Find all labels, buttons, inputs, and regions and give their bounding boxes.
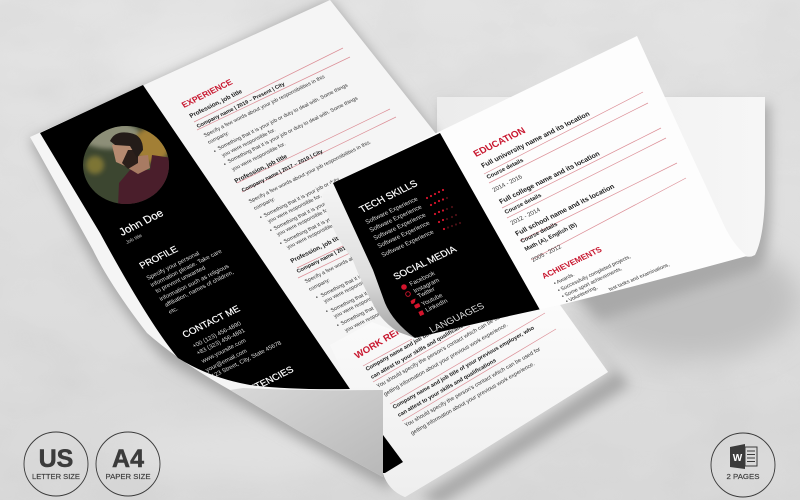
experience section: you were responsible for. — [267, 194, 323, 225]
page two sheet — [333, 36, 747, 338]
profile section: affiliation, names of children, — [164, 270, 236, 309]
achievements section: ACHIEVEMENTS — [540, 245, 604, 281]
work references section: getting information about your previous work experience. — [383, 322, 510, 398]
work references section: can attest to your skills and qualifications — [397, 358, 498, 419]
badge: A4 paper size: A4 — [112, 445, 144, 473]
contact section — [182, 305, 294, 386]
page one sheet — [30, 0, 608, 497]
work references section: Company name and job title of your previous employer, who — [365, 287, 509, 373]
contact section: your@email.com — [205, 349, 249, 374]
profile photo — [83, 126, 169, 204]
resume page two — [322, 36, 747, 340]
profile section: information such as religious — [159, 264, 230, 303]
social media section: Instagram — [412, 277, 441, 295]
experience section: Specify a few words about your job responsibilities in this. — [248, 140, 373, 205]
experience section: Company name | 2019 – Present | City — [196, 82, 286, 130]
education section: Full college name and its location — [498, 151, 601, 206]
contact section: CONTACT ME — [181, 304, 242, 340]
experience section: Profession, job title — [289, 233, 345, 265]
experience section: • — [213, 149, 218, 155]
tech skills section: Software Experience — [380, 229, 436, 259]
icon: Word document: W — [733, 453, 743, 464]
badge: US letter size — [24, 432, 88, 496]
experience section: Something that it is your job — [340, 293, 402, 327]
experience section: you were responsible for. — [333, 289, 389, 320]
name and job title: John Doe — [117, 208, 166, 238]
lower fold of the sheet — [349, 306, 632, 500]
badge: US letter size: US — [39, 445, 73, 473]
badge: A4 paper size — [96, 432, 160, 496]
profile section: PROFILE — [138, 244, 180, 271]
experience section: company: — [308, 277, 332, 293]
social media section: Youtube — [420, 292, 445, 308]
experience section: you were responsible for. — [286, 220, 342, 251]
social media section — [392, 244, 487, 335]
page two black sidebar — [333, 133, 540, 338]
experience section: • — [336, 323, 341, 329]
contact section: 123 Street, City, State 45678 — [211, 340, 284, 380]
resume page one — [26, 0, 440, 492]
experience section: you were responsible for. — [221, 128, 277, 159]
page one black sidebar — [40, 85, 350, 389]
experience section: Something that it is your job or duty to deal with. Some things — [217, 83, 350, 152]
social media section: SOCIAL MEDIA — [392, 244, 459, 282]
work references section: Company name and job title of your previous employer, who — [392, 325, 536, 411]
education section: Course details — [520, 222, 559, 245]
work references section: You should specify the person's contact which can be used for — [376, 308, 514, 390]
experience section: you were responsible for. — [323, 274, 379, 305]
experience section: you were responsible for. — [231, 142, 287, 173]
contact section: www.yoursite.com — [200, 338, 248, 365]
back sheet behind resume page two — [437, 97, 770, 320]
profile section: to prevent unwanted — [155, 266, 207, 295]
social media section: LinkedIn — [424, 298, 450, 314]
education section: 2012 - 2014 — [510, 207, 542, 227]
experience section: • — [223, 162, 228, 168]
black corner showing under lower sheet — [383, 435, 403, 473]
experience section: Specify a few words about your job — [304, 243, 381, 285]
sheet shadow on the ground — [420, 310, 630, 500]
experience section: • — [325, 309, 330, 315]
experience section: Specify a few words about your job responsibilities in this — [203, 74, 327, 139]
page one black corner under the fold — [383, 435, 403, 473]
social media section: LANGUAGES — [428, 301, 487, 335]
experience section: • — [269, 228, 274, 234]
experience section: you were responsible for. — [344, 303, 400, 334]
profile section: Specify your personal — [146, 251, 201, 282]
experience section: Something that it is your job or duty — [263, 177, 341, 219]
profile section: information please. Take care — [150, 249, 224, 289]
experience section: Something that it is your job — [320, 265, 382, 299]
badge: Word document, 2 pages — [711, 433, 775, 497]
experience section: Something that it is your job — [330, 280, 392, 314]
education section — [472, 92, 686, 264]
education section: Course details — [504, 193, 543, 216]
social media section: Twitter — [416, 286, 437, 300]
achievements section: • Successfully completed projects, — [557, 254, 632, 294]
tech skills section: Software Experience — [372, 212, 428, 242]
badge: US letter size: LETTER SIZE — [32, 472, 80, 481]
experience section: you were responsible for. — [276, 207, 332, 238]
education section: Math (A), English (B) — [524, 222, 578, 253]
badge: A4 paper size: PAPER SIZE — [106, 472, 151, 481]
experience section: • — [315, 295, 320, 301]
experience section: Profession, job title — [233, 153, 289, 185]
experience section — [180, 48, 402, 334]
experience section: • — [279, 241, 284, 247]
education section: 2005 - 2012 — [531, 244, 563, 264]
profile section — [138, 244, 236, 316]
profile section: etc. — [168, 306, 180, 316]
education section: Course details — [486, 158, 525, 181]
work references section: You should specify the person's contact which can be used for — [404, 347, 542, 429]
tech skills section: TECH SKILLS — [358, 178, 420, 215]
work references section: WORK REFERENCES — [353, 302, 444, 362]
page one folded corner flap — [230, 388, 383, 477]
contact section: +00 (123) 456-4890 — [192, 321, 243, 350]
social icons — [401, 284, 424, 316]
experience section: Something that it is your job or duty — [273, 190, 351, 232]
tech skills section: Software Experience — [364, 196, 420, 226]
experience section: EXPERIENCE — [180, 77, 235, 110]
tech skills section: Software Experience — [376, 220, 432, 250]
achievements section — [542, 247, 670, 302]
education section: Full university name and its location — [480, 111, 591, 170]
tech skills section: Software Experience — [368, 204, 424, 234]
achievements section: test tasks and examinations, — [608, 262, 671, 293]
page one sheet shadow — [30, 0, 437, 490]
name and job title: Job title — [125, 233, 144, 246]
experience section: Company name | 2015 – 2017 | City — [296, 230, 379, 275]
work references section — [354, 312, 556, 436]
experience section: • — [259, 215, 264, 221]
contact section: +83 (323) 456-4891 — [196, 328, 247, 357]
work references section: getting information about your previous work experience. — [410, 361, 537, 437]
experience section: Something that it is your job or duty to deal with. Some things — [227, 96, 360, 165]
experience section: Something that it is your job or duty — [283, 203, 361, 245]
experience section: Company name | 2017 – 2019 | City — [241, 149, 324, 194]
tech skills section — [358, 178, 461, 259]
experience section: company: — [253, 196, 277, 212]
social media section: Facebook — [408, 270, 437, 288]
lower sheet — [330, 305, 608, 497]
achievements section: • Some sport achievements, — [561, 266, 623, 300]
education section: Full school name and its location — [514, 183, 616, 238]
skill rating dots — [426, 189, 461, 230]
achievements section: • Awards. — [553, 272, 576, 287]
experience section: Profession, job title — [188, 88, 244, 120]
work references section: can attest to your skills and qualifications — [370, 320, 471, 381]
experience section: company: — [207, 130, 231, 146]
page two curled left edge — [322, 181, 415, 340]
education section: EDUCATION — [472, 126, 528, 159]
education section: 2014 - 2016 — [492, 174, 524, 194]
achievements section: • Volunteering, — [565, 285, 599, 305]
contact section: COMPETENCIES — [222, 365, 296, 407]
badge: Word document, 2 pages: 2 PAGES — [726, 472, 760, 481]
